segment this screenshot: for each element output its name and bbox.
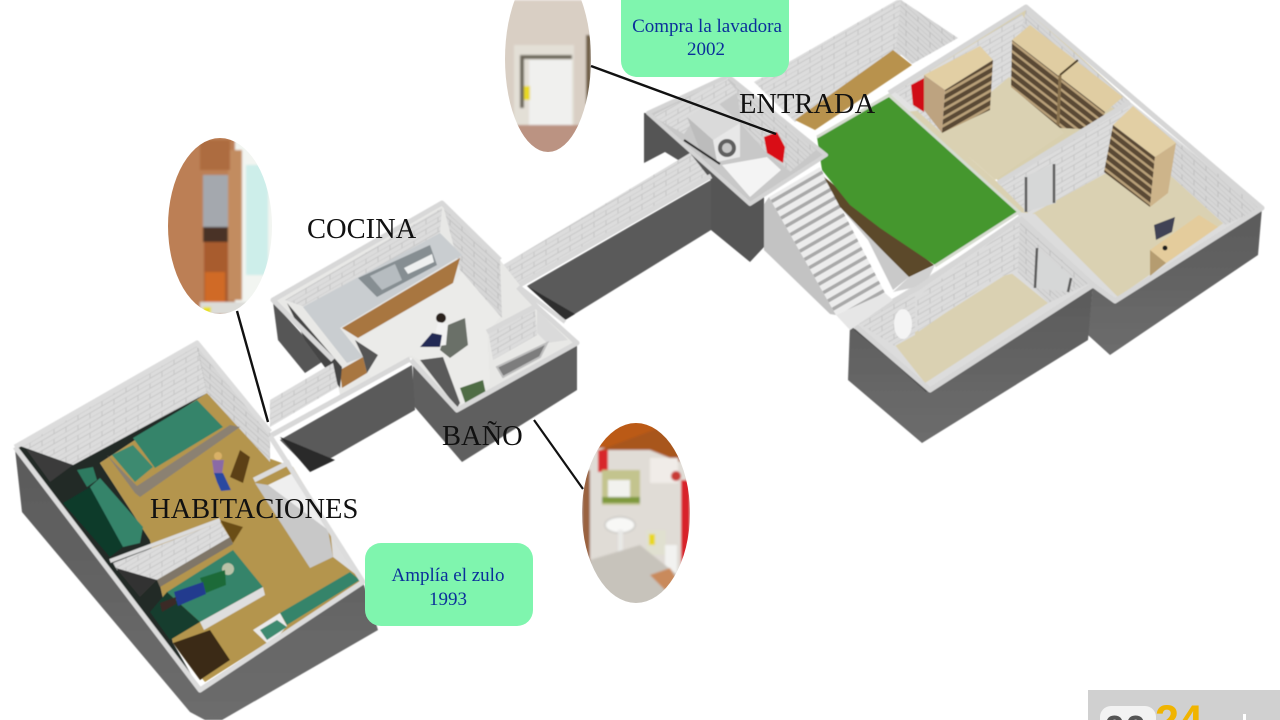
photo: hallway	[165, 135, 275, 317]
storage room one	[889, 7, 1130, 214]
kitchen walls	[285, 205, 502, 318]
callout: washing machine 2002: Compra la lavadora	[632, 16, 782, 37]
dividing wall with door	[998, 104, 1130, 215]
standing figure	[212, 450, 250, 491]
red door	[764, 132, 785, 163]
callout: expansion 1993: Amplía el zulo	[392, 565, 504, 586]
washing machine	[687, 102, 740, 162]
label: baño: BAÑO	[442, 420, 523, 452]
kitchen and bath block	[273, 203, 577, 462]
label: cocina: COCINA	[307, 214, 417, 245]
wall caps	[15, 343, 363, 690]
cabinet	[255, 472, 333, 568]
laundry room	[644, 76, 826, 262]
connector line: bathroom photo	[534, 420, 583, 489]
bathroom	[420, 308, 568, 408]
red door	[911, 78, 924, 112]
counter	[287, 233, 462, 388]
bathroom wing room	[854, 220, 1090, 392]
logo badge	[1088, 690, 1280, 720]
callout: expansion 1993	[365, 543, 533, 626]
wood floor	[100, 393, 363, 682]
photo: bathroom	[580, 420, 692, 610]
exterior wall	[15, 449, 378, 720]
white wall caps of the right wing	[852, 7, 1262, 390]
label: habitaciones: HABITACIONES	[150, 494, 358, 525]
connector line: door photo	[591, 66, 776, 134]
right side wall	[293, 467, 363, 580]
callout: washing machine 2002	[621, 0, 789, 77]
exterior walls	[273, 302, 325, 373]
shelf unit two	[1011, 25, 1123, 130]
desk and computer	[1150, 215, 1218, 276]
bedrooms	[15, 343, 378, 720]
shelf unit one	[924, 46, 993, 133]
corridor between kitchen and laundry	[498, 153, 711, 322]
dividing wall	[110, 520, 243, 597]
office room	[998, 104, 1262, 297]
left bed	[63, 467, 143, 557]
shelf unit three	[1104, 106, 1176, 207]
label: entrada: ENTRADA	[739, 89, 876, 120]
person in the kitchen	[420, 313, 468, 358]
stairs	[762, 167, 909, 330]
callout: washing machine 2002: 2002	[687, 39, 725, 60]
garden: grass and soil	[817, 95, 1019, 277]
callout: expansion 1993: 1993	[429, 589, 467, 610]
back wall	[20, 345, 207, 465]
connector line: hallway photo	[237, 311, 268, 422]
right wing: storage rooms and bathroom	[754, 0, 1262, 443]
kitchen floor	[358, 272, 500, 405]
corridor between bedrooms and kitchen	[270, 359, 415, 472]
toilet	[894, 309, 912, 339]
entry room	[754, 0, 958, 130]
wall caps	[273, 203, 577, 410]
bench bed	[253, 572, 360, 646]
bunk bed	[107, 400, 240, 497]
photo: washing machine hideout door	[505, 0, 591, 152]
lower bed with figure	[150, 550, 265, 680]
